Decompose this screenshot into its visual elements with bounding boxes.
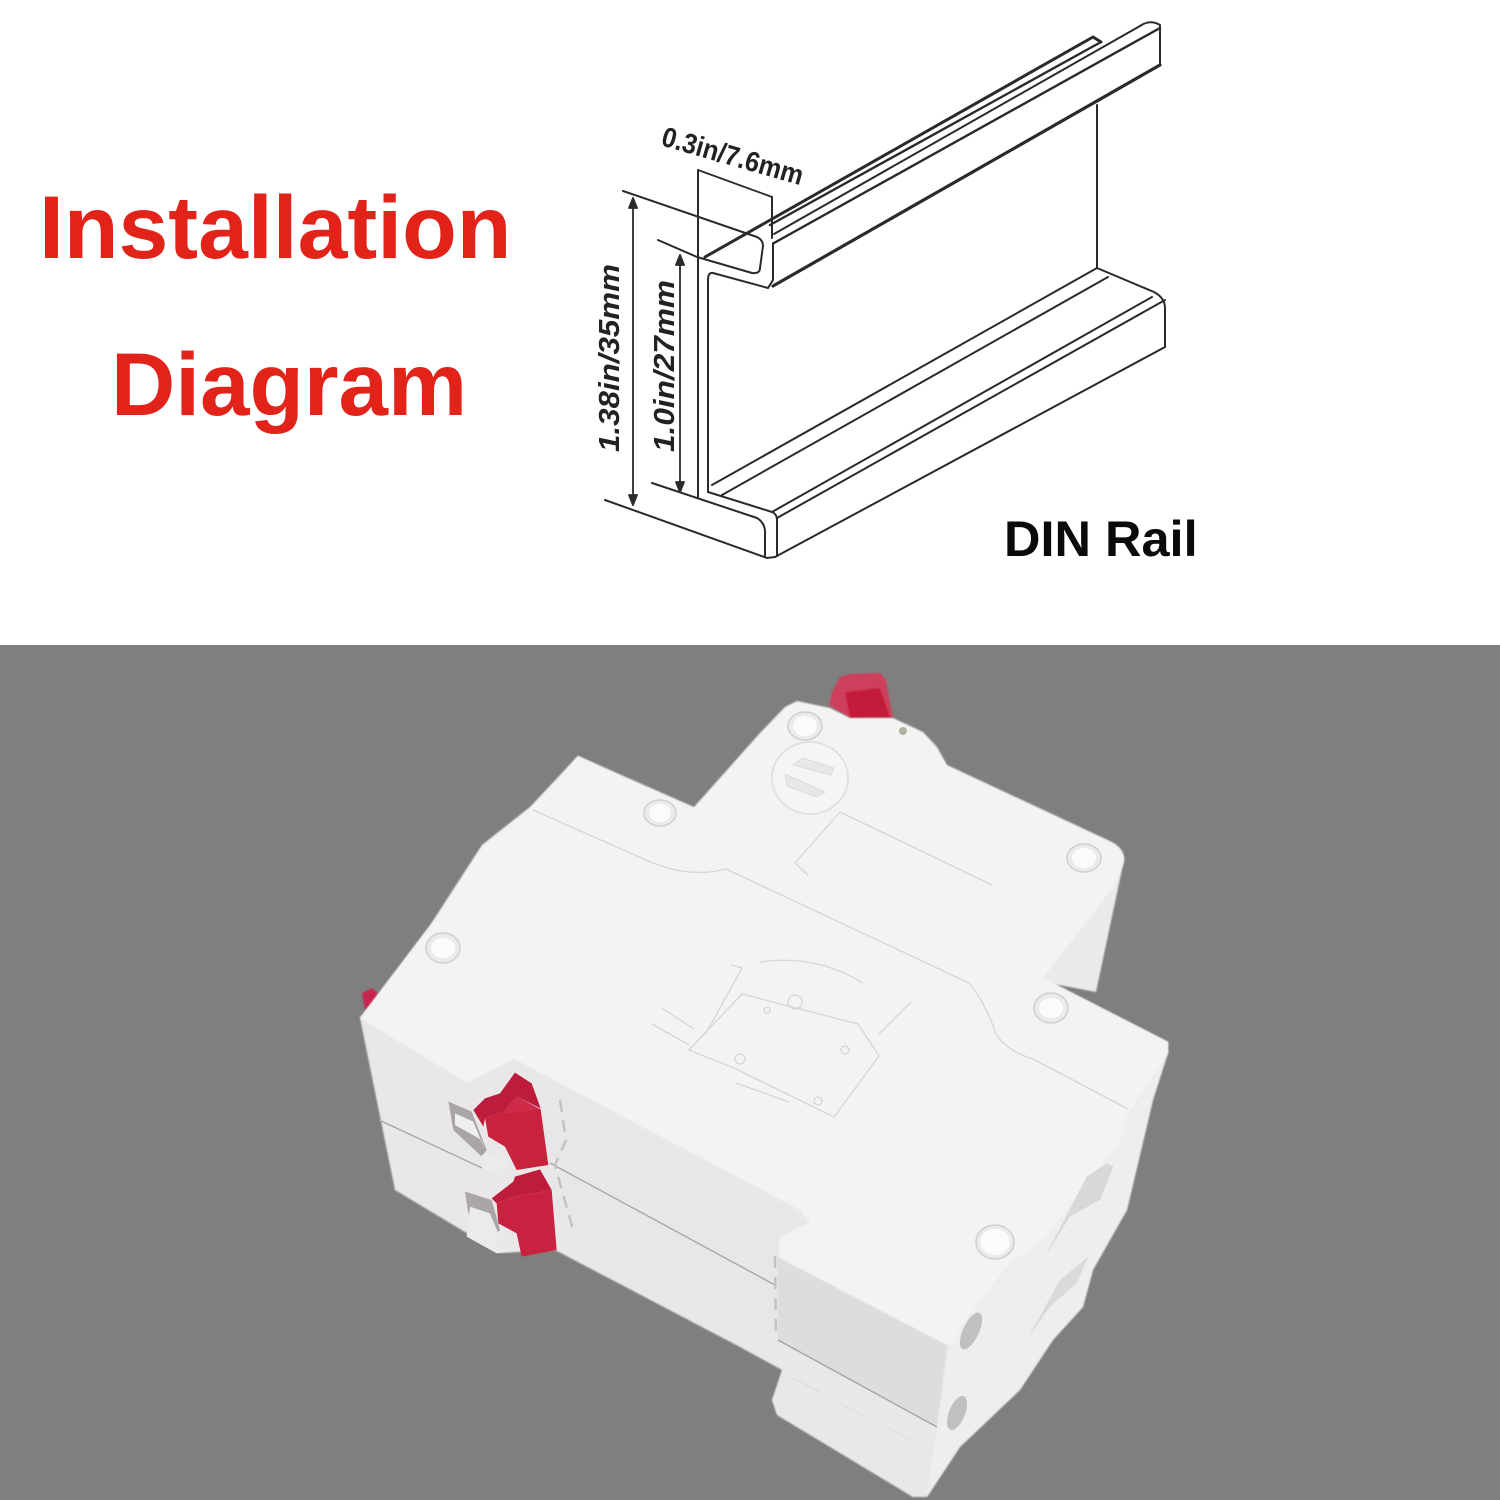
dimension: 1.38in/35mm: 1.38in/35mm xyxy=(594,264,626,452)
panel: grey photo background xyxy=(0,645,1500,1500)
breaker top face xyxy=(360,701,1168,1345)
dimension: 1.0in/27mm: 1.0in/27mm xyxy=(649,280,681,452)
rivets xyxy=(426,712,1101,1259)
upper toggle slot xyxy=(448,1102,508,1171)
top face seam and embossing xyxy=(533,810,1128,1117)
dimension lines xyxy=(629,170,772,505)
end face lower xyxy=(772,1340,937,1497)
front toggles xyxy=(448,1073,557,1257)
lower toggle xyxy=(492,1169,557,1257)
fuse window xyxy=(772,742,848,814)
upper rail lip xyxy=(705,22,1160,288)
title xyxy=(39,177,511,434)
rail cross-section profile xyxy=(623,170,772,512)
terminal side xyxy=(927,1053,1168,1497)
rear shaded wedge xyxy=(1038,860,1124,992)
diagram: DIN rail line drawing xyxy=(605,22,1165,558)
end face upper xyxy=(778,1257,947,1427)
upper toggle xyxy=(473,1073,548,1170)
body silhouette xyxy=(360,756,1168,1497)
rear red toggle xyxy=(362,673,893,1010)
rear web edge xyxy=(1097,105,1165,347)
lower toggle slot xyxy=(465,1192,517,1253)
terminal holes xyxy=(943,1309,987,1433)
photo: circuit breaker xyxy=(360,673,1168,1497)
long side recess xyxy=(514,1059,810,1340)
side grooves and scuffs xyxy=(379,1100,937,1453)
lower rail flange xyxy=(605,268,1165,558)
title: Diagram xyxy=(111,334,467,434)
terminal recesses xyxy=(1027,1163,1113,1340)
title: Installation xyxy=(39,177,511,277)
label: DIN Rail: DIN Rail xyxy=(1004,510,1198,567)
breaker side faces xyxy=(360,756,1168,1497)
dimension: 0.3in/7.6mm: 0.3in/7.6mm xyxy=(658,121,807,191)
